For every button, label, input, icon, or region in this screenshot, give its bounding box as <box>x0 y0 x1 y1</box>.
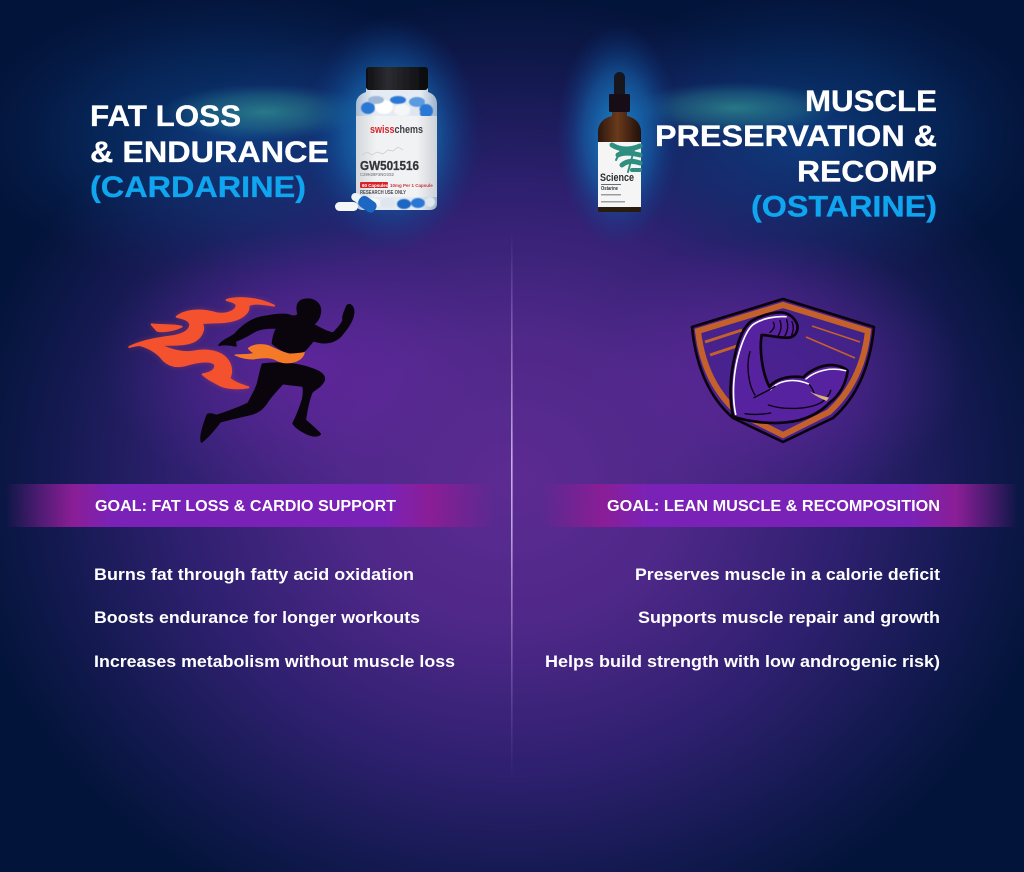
icon: running man with flames <box>129 298 353 442</box>
runner silhouette <box>201 299 353 442</box>
heading: muscle preservation and recomp: PRESERVATION & <box>655 120 937 153</box>
heading: fat loss and endurance: & ENDURANCE <box>90 136 329 169</box>
benefits list: Ostarine: Preserves muscle in a calorie deficit <box>635 566 941 584</box>
product: GW501516 capsule bottle: C29H28F3NO3S2 <box>360 172 395 177</box>
heading: fat loss and endurance: FAT LOSS <box>90 100 241 133</box>
banner: goal lean muscle and recomposition <box>540 484 1018 527</box>
flames <box>129 298 274 388</box>
product: Ostarine dropper bottle: Science <box>600 172 634 184</box>
panel: left column, Cardarine <box>5 67 500 671</box>
benefits list: Cardarine: Boosts endurance for longer workouts <box>94 609 420 627</box>
benefits list: Cardarine: Increases metabolism without muscle loss <box>94 653 455 671</box>
shield <box>692 299 874 442</box>
panel: right column, Ostarine <box>540 72 1018 671</box>
heading: muscle preservation and recomp: (OSTARINE) <box>751 190 937 224</box>
benefits list: Cardarine: Burns fat through fatty acid oxidation <box>94 566 414 584</box>
banner: goal fat loss and cardio support: GOAL: FAT LOSS & CARDIO SUPPORT <box>95 498 397 515</box>
glow: right bottle <box>556 0 1024 280</box>
heading: fat loss and endurance <box>90 100 329 204</box>
product: Ostarine dropper bottle <box>598 72 641 212</box>
product: GW501516 capsule bottle: 60 Capsules <box>362 183 389 188</box>
center divider <box>511 232 513 780</box>
product: GW501516 capsule bottle: 10mg Per 1 Capsule <box>390 183 433 188</box>
product: GW501516 capsule bottle <box>335 67 437 215</box>
banner: goal lean muscle and recomposition: GOAL: LEAN MUSCLE & RECOMPOSITION <box>607 498 940 515</box>
icon: shield with flexed bicep <box>692 299 874 442</box>
heading: muscle preservation and recomp <box>655 85 937 224</box>
banner: goal fat loss and cardio support <box>5 484 495 527</box>
bicep arm <box>731 312 848 423</box>
product: GW501516 capsule bottle: GW501516 <box>360 158 419 173</box>
product: Ostarine dropper bottle: Ostarine <box>601 186 618 192</box>
glow: left bottle <box>0 0 500 280</box>
heading: muscle preservation and recomp: RECOMP <box>797 156 937 188</box>
heading: muscle preservation and recomp: MUSCLE <box>805 85 937 118</box>
glow: shield halo <box>585 237 965 507</box>
belt flame <box>235 345 304 363</box>
benefits list: Ostarine: Supports muscle repair and growth <box>638 609 940 627</box>
product: GW501516 capsule bottle: swisschems <box>370 124 423 136</box>
product: GW501516 capsule bottle: RESEARCH USE ONLY <box>360 190 406 196</box>
benefits list: Ostarine: Helps build strength with low androgenic risk) <box>545 653 940 671</box>
heading: fat loss and endurance: (CARDARINE) <box>90 171 306 204</box>
benefits list: Cardarine <box>94 566 455 671</box>
benefits list: Ostarine <box>545 566 941 671</box>
glow: runner halo <box>100 230 500 500</box>
